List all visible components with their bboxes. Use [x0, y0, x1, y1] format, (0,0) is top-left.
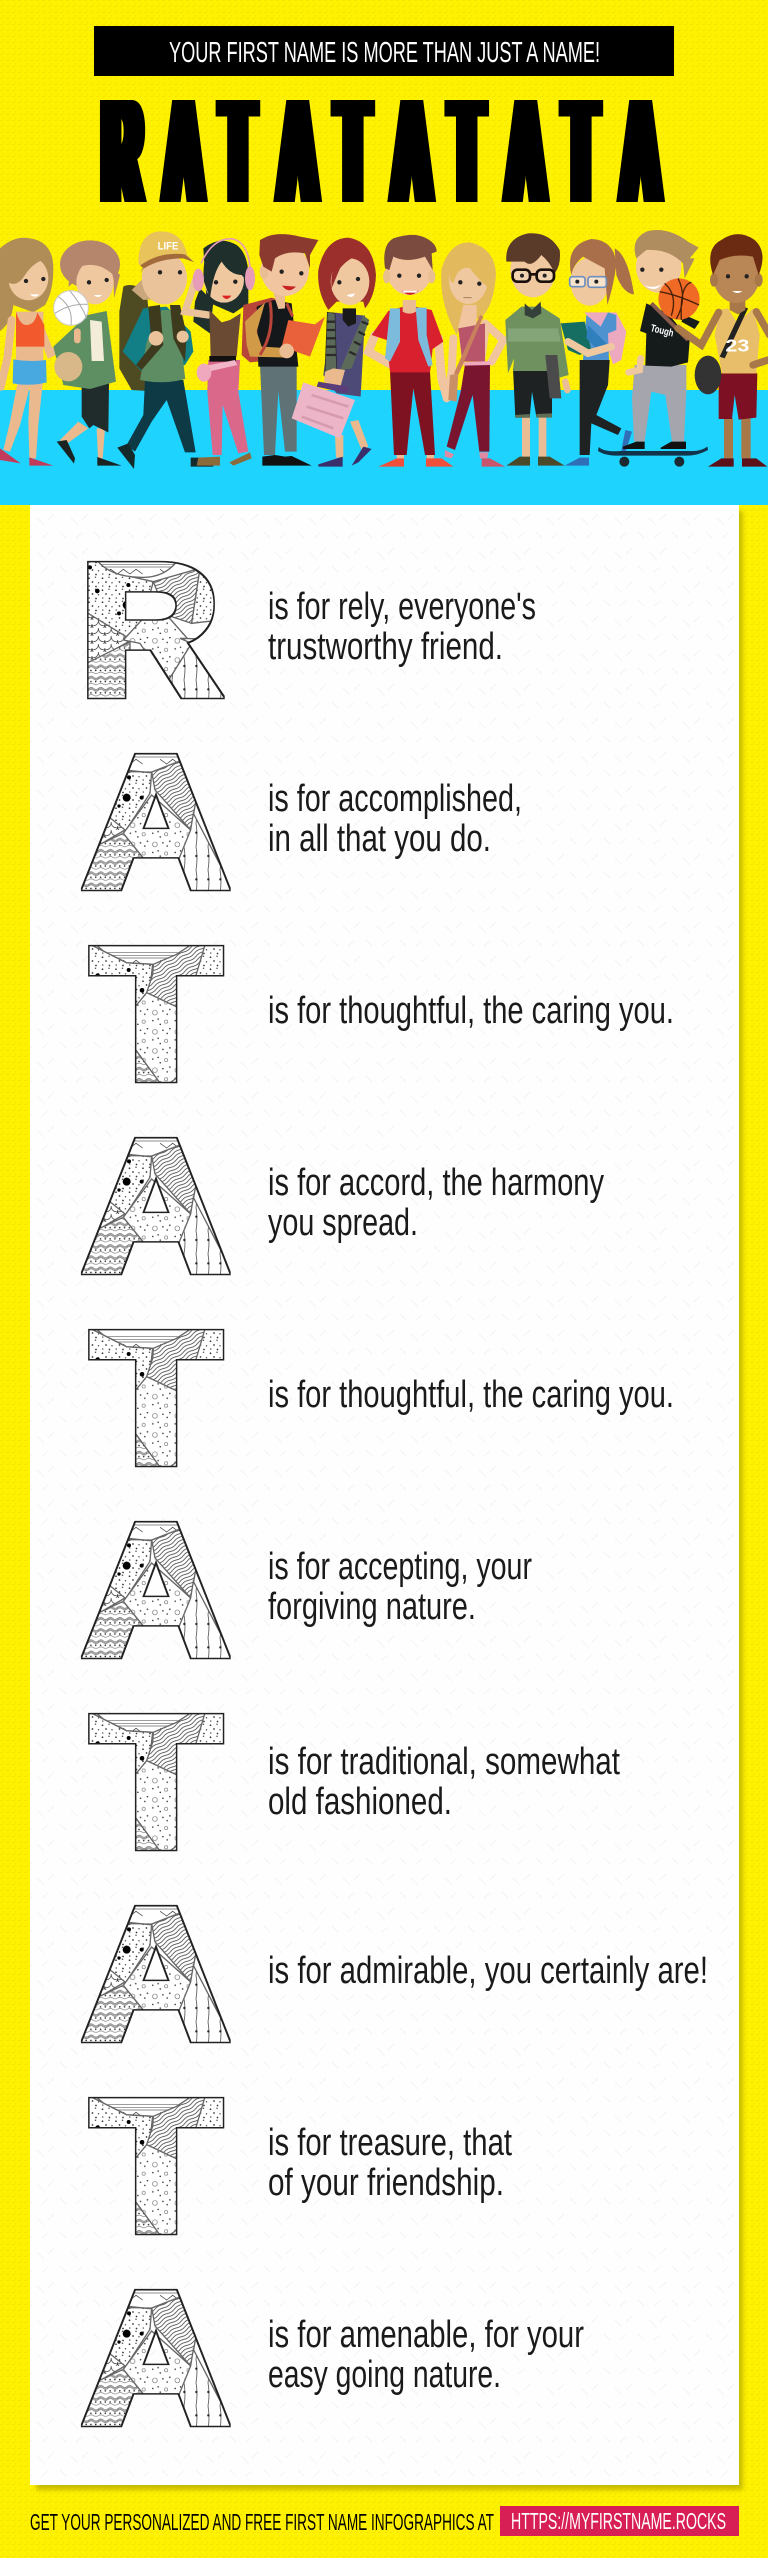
row 5: letter T and text	[92, 1296, 674, 1502]
boy with curly hair and jersey: 23	[725, 336, 750, 356]
row 8: letter A and text	[84, 1872, 708, 2078]
title: name: RATATATATA	[103, 67, 659, 234]
boy with cap and big backpack: LIFE	[158, 241, 178, 253]
letter A illustration: A	[84, 720, 228, 926]
cyan floor band	[0, 390, 768, 505]
boy on skateboard with basketball: Tough	[649, 323, 675, 340]
text: treasure	[268, 2122, 512, 2204]
girl with volleyball	[53, 240, 122, 466]
text: accomplished: is for accomplished,	[268, 778, 522, 820]
text: rely	[268, 586, 536, 668]
row 4: letter A and text	[84, 1104, 604, 1310]
text: accomplished	[268, 778, 522, 860]
text: rely: is for rely, everyone's	[268, 586, 536, 628]
girl with headphones	[185, 239, 255, 466]
girl with long hair	[0, 238, 77, 466]
letter R illustration: R	[80, 528, 220, 734]
text: accord: is for accord, the harmony	[268, 1162, 604, 1204]
letter T illustration: T	[92, 1296, 220, 1502]
row 2: letter A and text	[84, 720, 522, 926]
letter T illustration: T	[92, 1680, 220, 1886]
boy in red shirt	[368, 235, 453, 467]
text: accepting: is for accepting, your	[268, 1546, 532, 1588]
row 9: letter T and text	[92, 2064, 512, 2270]
letter T illustration: T	[92, 912, 220, 1118]
text: traditional: is for traditional, somewhat	[268, 1741, 620, 1783]
row 7: letter T and text	[92, 1680, 620, 1886]
boy with black glasses and laptop	[505, 233, 569, 466]
letter T illustration: T	[92, 2064, 220, 2270]
header bar with tagline	[94, 26, 674, 76]
letter A illustration: A	[84, 1872, 228, 2078]
text: amenable	[268, 2314, 584, 2396]
girl with pink bag	[292, 238, 376, 467]
text: accepting	[268, 1546, 532, 1628]
row 6: letter A and text	[84, 1488, 532, 1694]
letter A illustration: A	[84, 1488, 228, 1694]
boy on skateboard with basketball	[598, 230, 708, 467]
text: accepting: forgiving nature.	[268, 1586, 476, 1628]
girl with ponytail and blue glasses	[561, 239, 634, 466]
text: treasure: of your friendship.	[268, 2162, 504, 2204]
text: accord	[268, 1162, 604, 1244]
illustration: group of thirteen students	[0, 230, 768, 469]
boy with curly hair and jersey	[678, 234, 768, 467]
boy with cap and big backpack	[117, 231, 213, 469]
letter A illustration: A	[84, 2256, 228, 2462]
text: rely: trustworthy friend.	[268, 626, 503, 668]
white content panel	[30, 505, 743, 2490]
letter A illustration: A	[84, 1104, 228, 1310]
blonde girl with shoulder bag	[441, 242, 505, 467]
row 3: letter T and text	[92, 912, 674, 1118]
row 1: letter R and text	[80, 528, 536, 734]
text: accord: you spread.	[268, 1202, 418, 1244]
row 10: letter A and text	[84, 2256, 584, 2462]
boy reading a book	[242, 234, 325, 466]
text: amenable: easy going nature.	[268, 2354, 501, 2396]
text: treasure: is for treasure, that	[268, 2122, 512, 2164]
text: traditional: old fashioned.	[268, 1781, 452, 1823]
text: amenable: is for amenable, for your	[268, 2314, 584, 2356]
text: accomplished: in all that you do.	[268, 818, 491, 860]
text: traditional	[268, 1741, 620, 1823]
